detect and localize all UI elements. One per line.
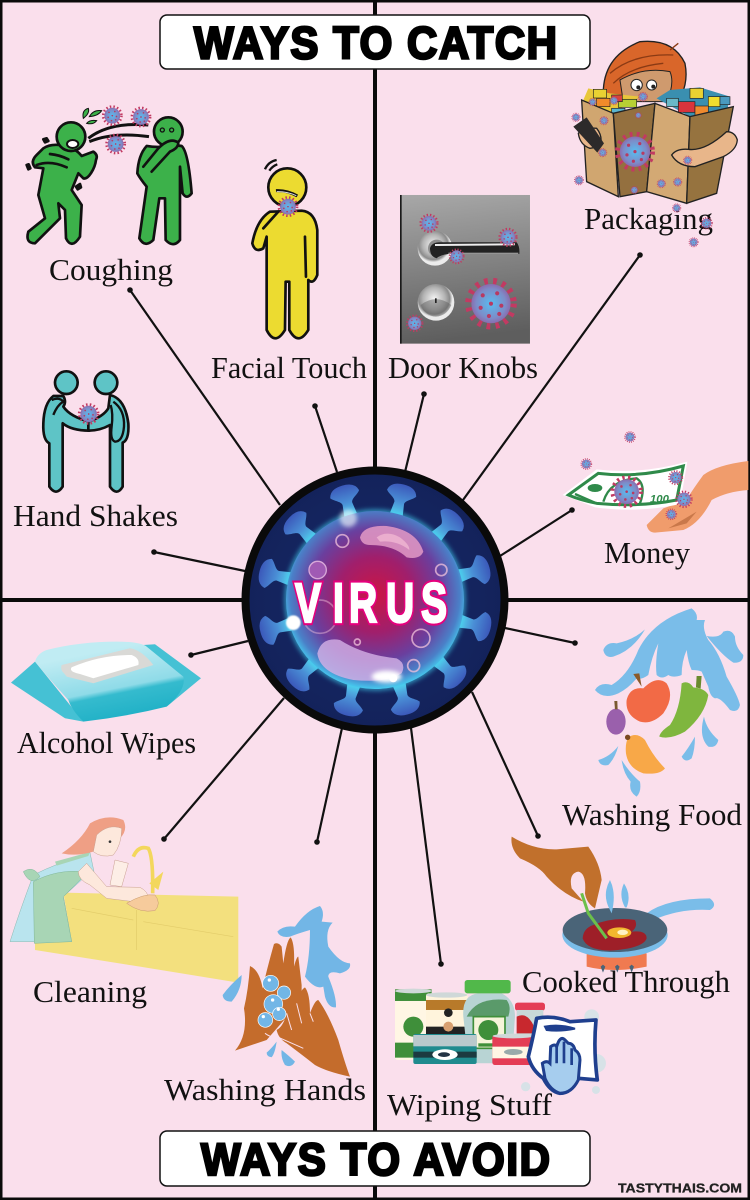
icon: hand with banknote — [563, 432, 748, 533]
item: washing food — [562, 608, 743, 832]
icon: coughing figures — [27, 106, 192, 244]
icon: fruits and water splash — [595, 608, 743, 797]
label: facial touch: Facial Touch — [211, 350, 367, 385]
icon: wipes packet — [11, 642, 201, 722]
icon: hand cooking steak in pan — [511, 837, 714, 973]
label: cooked through: Cooked Through — [522, 964, 730, 999]
label: door knobs: Door Knobs — [388, 350, 538, 385]
icon: soapy hands under water — [223, 906, 350, 1077]
icon: woman cleaning a sink — [10, 817, 238, 983]
label: alcohol wipes: Alcohol Wipes — [17, 725, 196, 760]
item: cleaning — [10, 817, 238, 1009]
label: packaging: Packaging — [584, 201, 713, 236]
icon: woman holding grocery bags — [572, 41, 737, 203]
icon: hand with banknote: 100 — [650, 494, 670, 506]
item: cooked through — [511, 837, 730, 999]
virus spikes — [256, 481, 494, 719]
virus title: VIRUS — [295, 573, 447, 635]
central virus illustration — [246, 470, 504, 730]
label: washing food: Washing Food — [562, 797, 742, 832]
icon: door handle and lock — [400, 195, 530, 344]
connector lines — [127, 252, 643, 967]
icon: cans and cleaning cloth — [395, 980, 606, 1094]
virus title: VIRUS — [295, 573, 447, 635]
heading: ways to catch: WAYS TO CATCH — [194, 18, 557, 69]
icon: two figures shaking hands — [43, 371, 128, 492]
heading: ways to avoid: WAYS TO AVOID — [201, 1135, 550, 1185]
label: washing hands: Washing Hands — [164, 1072, 366, 1107]
icon: yellow figure touching face — [252, 160, 317, 338]
watermark: TASTYTHAIS.COM — [618, 1180, 742, 1196]
item: money — [563, 432, 748, 570]
icon: viruses over packaging label — [673, 204, 712, 247]
virus sphere — [284, 509, 466, 691]
item: door knobs — [388, 195, 538, 385]
item: hand shakes — [13, 371, 178, 533]
item: washing hands — [164, 906, 366, 1107]
label: coughing: Coughing — [49, 252, 173, 287]
item: wiping stuff — [387, 980, 606, 1122]
item: facial touch — [211, 160, 367, 385]
label: hand shakes: Hand Shakes — [13, 498, 178, 533]
label: money: Money — [604, 535, 690, 570]
item: coughing — [27, 106, 192, 287]
label: cleaning: Cleaning — [33, 974, 147, 1009]
item: packaging — [572, 41, 737, 247]
label: wiping stuff: Wiping Stuff — [387, 1087, 553, 1122]
item: alcohol wipes — [11, 642, 201, 760]
